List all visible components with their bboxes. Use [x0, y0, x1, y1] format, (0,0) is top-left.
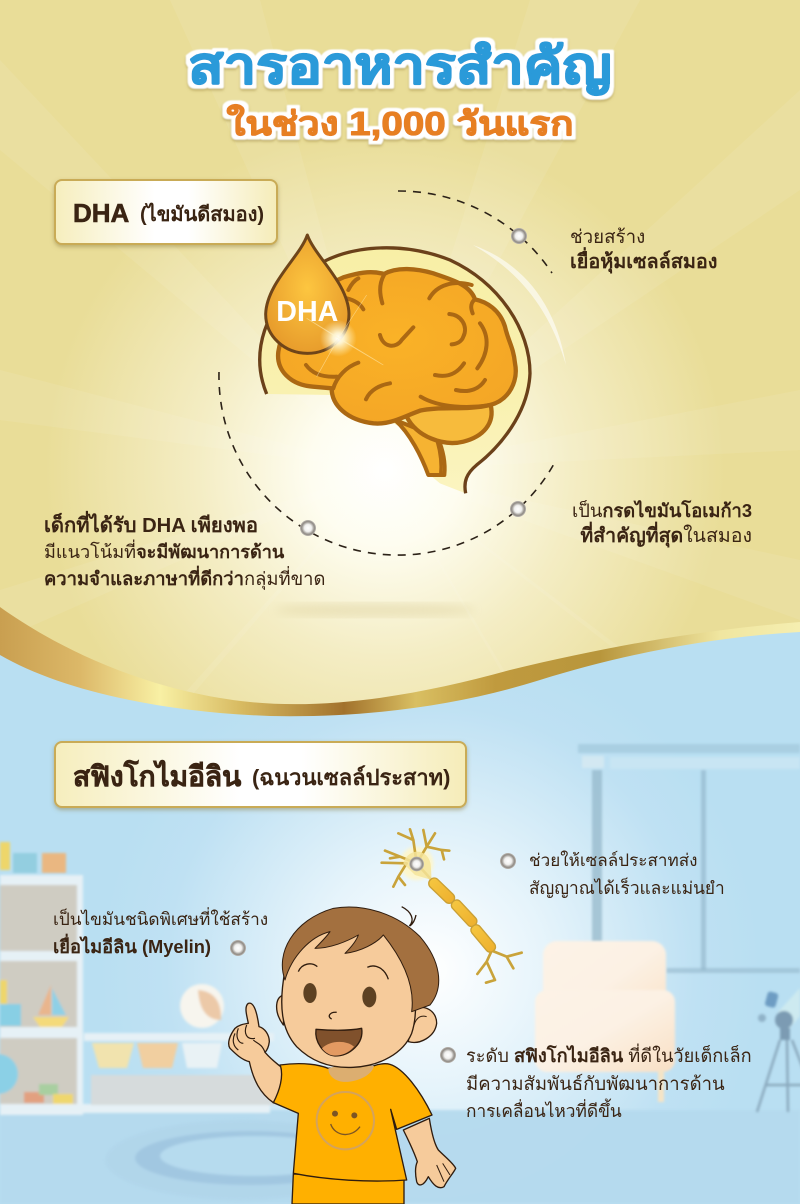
shirt [273, 1064, 432, 1181]
text block: motor development [466, 1043, 752, 1121]
title: สารอาหารสำคัญ [188, 39, 612, 95]
text block: memory and language: ความจำและภาษาที่ดีกว่ากลุ่มที่ขาด [44, 565, 325, 591]
DHA drop label: DHA [276, 296, 338, 328]
text block: memory and language [44, 510, 325, 591]
subtitle: ในช่วง 1,000 วันแรก [226, 104, 574, 142]
cerebellum [407, 405, 492, 443]
text block: builds brain cell membrane: ช่วยสร้าง [570, 226, 645, 247]
cerebrum [278, 269, 516, 424]
right ear [408, 1007, 437, 1042]
decoration: soft shadow under glow [275, 603, 475, 617]
marker dot: myelin [230, 940, 246, 956]
text block: motor development: ระดับ สฟิงโกไมอีลิน ที่ดีในวัยเด็กเล็ก [466, 1043, 752, 1066]
sparkle [320, 320, 357, 357]
brain folds [306, 275, 490, 407]
shorts [292, 1174, 404, 1204]
face [282, 920, 415, 1067]
hair [282, 907, 439, 1012]
marker dot: memory [300, 520, 316, 536]
text block: myelin fat [53, 907, 268, 957]
text block: nerve signal: ช่วยให้เซลล์ประสาทส่ง [529, 850, 698, 870]
decoration: white curved flare [473, 245, 566, 365]
text block: omega 3: ที่สำคัญที่สุดในสมอง [580, 521, 752, 548]
marker dot: omega 3 [510, 501, 526, 517]
panel: DHA heading: DHA [73, 198, 130, 228]
marker dot: signal [500, 853, 516, 869]
text block: nerve signal [529, 850, 725, 898]
marker dot: myelin sheath [511, 228, 527, 244]
right arm [403, 1118, 456, 1188]
neck [328, 1065, 374, 1082]
panel: gold wave band [0, 600, 800, 716]
text block: myelin fat: เป็นไขมันชนิดพิเศษที่ใช้สร้าง [53, 907, 268, 929]
smiley on shirt [317, 1092, 374, 1149]
text block: myelin fat: เยื่อไมอีลิน (Myelin) [53, 933, 211, 957]
dashed arc lower [219, 372, 555, 555]
dashed arc upper [398, 191, 552, 273]
text block: nerve signal: สัญญาณได้เร็วและแม่นยำ [529, 877, 725, 898]
nose [329, 1012, 337, 1019]
panel: sphingomyelin heading [55, 742, 466, 807]
left ear [277, 995, 285, 1025]
brain stem [395, 420, 445, 475]
background: sofa [535, 941, 675, 1102]
panel: sphingomyelin heading: สฟิงโกไมอีลิน [73, 759, 241, 792]
head silhouette [260, 248, 530, 493]
icon: brain with DHA drop [260, 235, 530, 493]
mouth [316, 1028, 362, 1056]
text block: builds brain cell membrane: เยื่อหุ้มเซลล์สมอง [570, 247, 717, 274]
raised arm and hand [229, 1003, 282, 1103]
eyes [303, 983, 317, 1003]
background: toy shelf [0, 842, 276, 1115]
background: window [578, 744, 800, 973]
panel: DHA heading [55, 180, 277, 244]
icon: neuron [382, 829, 522, 983]
text block: memory and language: เด็กที่ได้รับ DHA เพียงพอ [44, 510, 258, 537]
illustration: boy pointing [229, 907, 456, 1204]
panel: sphingomyelin heading: (ฉนวนเซลล์ประสาท) [252, 765, 450, 790]
eyebrows [298, 964, 388, 979]
text block: omega 3: เป็นกรดไขมันโอเมก้า3 [572, 499, 752, 521]
marker dot: motor development [440, 1047, 456, 1063]
background: telescope [757, 988, 800, 1112]
panel: DHA heading: (ไขมันดีสมอง) [140, 202, 264, 226]
text block: omega 3 [572, 499, 752, 548]
background: light rays [0, 0, 800, 715]
text block: motor development: การเคลื่อนไหวที่ดีขึ้น [466, 1098, 622, 1121]
text block: motor development: มีความสัมพันธ์กับพัฒนาการด้าน [466, 1073, 725, 1094]
drop [266, 235, 349, 353]
panel: upper yellow background [0, 0, 800, 704]
background: rug [105, 1120, 375, 1200]
text block: builds brain cell membrane [570, 226, 717, 274]
panel: lower blue room background [0, 600, 800, 1204]
text block: memory and language: มีแนวโน้มที่จะมีพัฒนาการด้าน [44, 539, 285, 562]
